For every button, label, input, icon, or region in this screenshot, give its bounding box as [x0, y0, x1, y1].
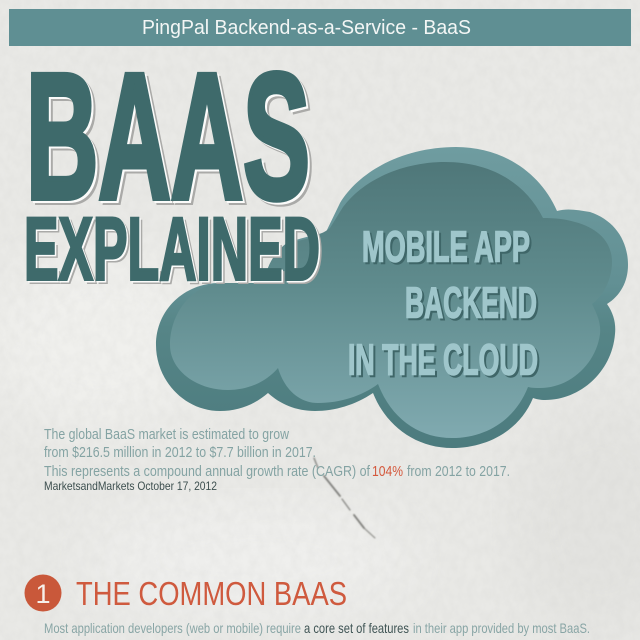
title: EXPLAINED	[24, 198, 323, 302]
number badge 1	[24, 574, 62, 612]
top banner: PingPal Backend-as-a-Service - BaaS	[142, 17, 471, 39]
cloud headline: BACKEND	[407, 280, 539, 329]
title: EXPLAINED: EXPLAINED	[24, 198, 320, 298]
cloud headline	[348, 222, 540, 386]
number badge 1: 1	[35, 579, 51, 609]
section intro text	[44, 620, 590, 636]
market statistic text: 104%	[372, 463, 403, 480]
cloud headline: MOBILE APP	[362, 222, 530, 271]
source citation: MarketsandMarkets October 17, 2012	[44, 479, 217, 493]
title: BAAS: BAAS	[26, 36, 310, 236]
cloud face	[170, 162, 612, 438]
cloud	[156, 147, 628, 448]
cloud headline: MOBILE APP	[364, 224, 532, 273]
market statistic text: This represents a compound annual growth rate (CAGR) of	[44, 463, 371, 480]
title: BAAS: BAAS	[30, 40, 314, 240]
title: EXPLAINED: EXPLAINED	[27, 202, 323, 302]
section intro text: in their app provided by most BaaS.	[413, 620, 590, 636]
market statistic text: The global BaaS market is estimated to grow	[44, 426, 289, 443]
title: BAAS: BAAS	[28, 38, 312, 238]
market statistic text	[44, 426, 510, 480]
section intro text: a core set of features	[304, 620, 409, 636]
cloud headline: BACKEND	[405, 278, 537, 327]
top banner	[9, 9, 631, 46]
section heading: THE COMMON BAAS	[76, 575, 347, 612]
section intro text: Most application developers (web or mobile) require	[44, 620, 301, 636]
market statistic text: from $216.5 million in 2012 to $7.7 billion in 2017.	[44, 444, 316, 461]
title: BAAS	[26, 36, 314, 240]
market statistic text: from 2012 to 2017.	[407, 463, 510, 480]
title: EXPLAINED: EXPLAINED	[26, 200, 322, 300]
cloud rim	[156, 147, 628, 448]
